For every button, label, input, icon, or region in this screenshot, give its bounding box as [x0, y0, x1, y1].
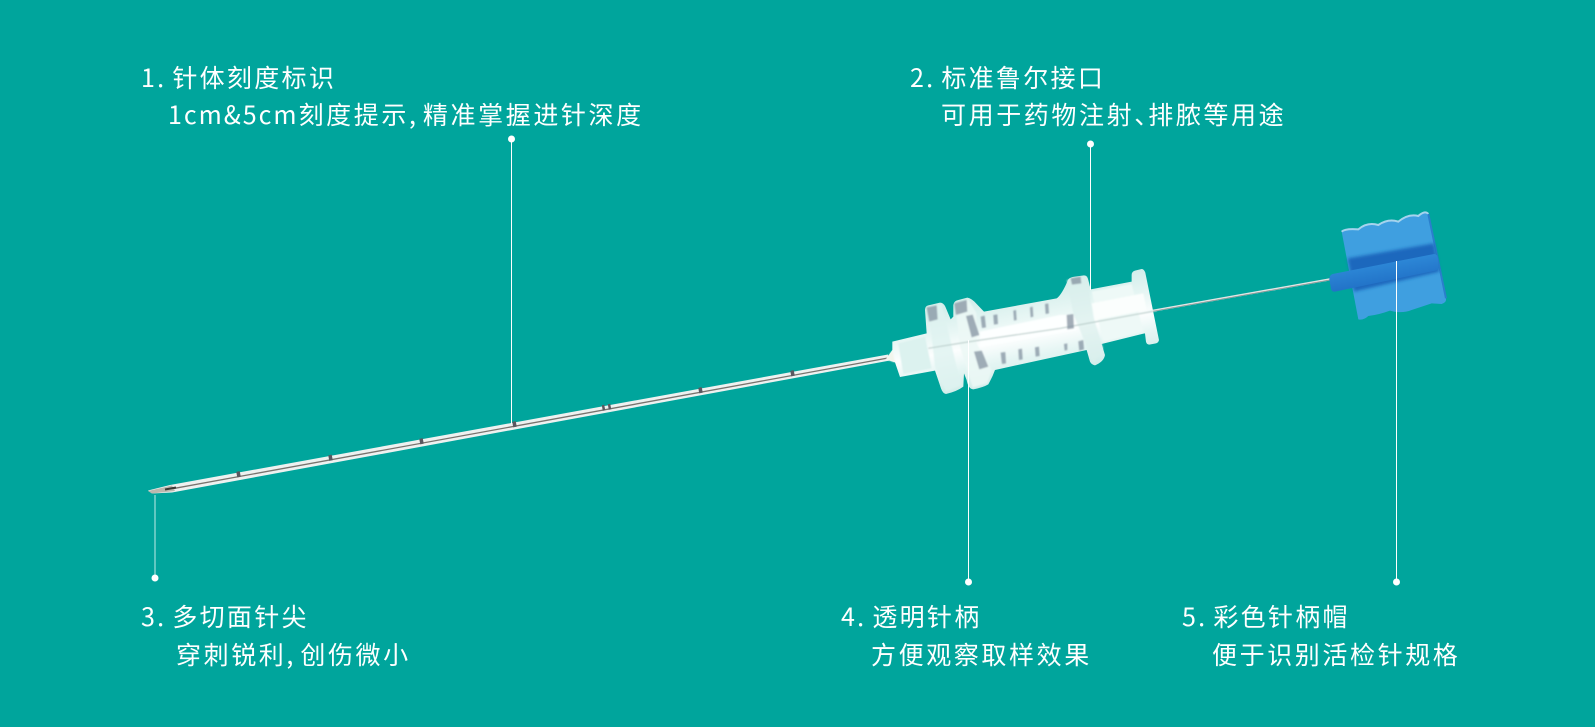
callout 4: transparent handle	[841, 598, 1092, 672]
leader line 3	[152, 495, 158, 582]
callout 4: transparent handle: 4. 透明针柄	[841, 598, 982, 634]
leader line 2	[1087, 140, 1094, 290]
cap groove	[1348, 243, 1439, 292]
leader line 4	[965, 340, 972, 586]
callout 5: coloured cap: 5. 彩色针柄帽	[1182, 598, 1350, 634]
transparent hub	[886, 269, 1159, 394]
callout 3: needle tip: 穿刺锐利,创伤微小	[176, 636, 411, 672]
depth scale marks	[238, 370, 793, 477]
callout 1: scale marks	[141, 59, 644, 132]
hub silhouette	[886, 269, 1159, 394]
callout 3: needle tip: 3. 多切面针尖	[141, 598, 309, 634]
needle shaft: thin section toward cap	[1140, 279, 1332, 314]
needle shaft: graduated section	[148, 354, 890, 494]
callout 1: scale marks: 1cm&5cm刻度提示,精准掌握进针深度	[168, 96, 644, 132]
leader line 1	[508, 136, 515, 424]
callout 2: luer connector	[910, 59, 1286, 132]
callout 4: transparent handle: 方便观察取样效果	[871, 636, 1092, 672]
callout 2: luer connector: 可用于药物注射、排脓等用途	[941, 96, 1286, 132]
callout 5: coloured cap	[1182, 598, 1460, 672]
needle tip	[148, 486, 175, 494]
callout 3: needle tip	[141, 598, 411, 672]
cap body	[1342, 212, 1446, 320]
blue needle cap	[1329, 212, 1446, 320]
hub details	[886, 277, 1157, 392]
leader line 5	[1393, 261, 1400, 586]
callout 1: scale marks: 1. 针体刻度标识	[141, 59, 336, 95]
cap stem	[1329, 254, 1439, 292]
callout 2: luer connector: 2. 标准鲁尔接口	[910, 59, 1105, 95]
callout 5: coloured cap: 便于识别活检针规格	[1212, 636, 1460, 672]
dark refraction details	[927, 277, 1084, 369]
